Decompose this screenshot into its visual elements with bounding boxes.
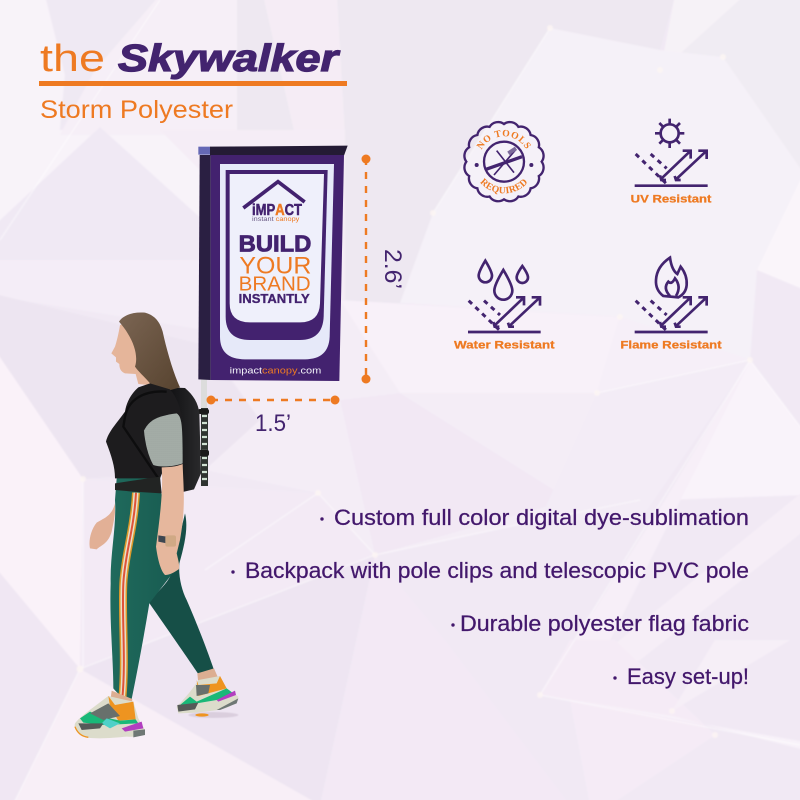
flag xyxy=(198,146,348,381)
label: flame resistant: Flame Resistant xyxy=(620,340,722,352)
icon: water resistant xyxy=(468,261,541,332)
title underline xyxy=(39,81,347,86)
person with backpack xyxy=(75,312,238,738)
far ankle xyxy=(197,668,218,683)
width dimension xyxy=(206,396,340,437)
near ankle xyxy=(111,691,132,707)
flag url: impactcanopy.com xyxy=(230,366,322,376)
near shoe xyxy=(75,696,145,738)
width label: 1.5’ xyxy=(255,410,291,437)
icon: no tools required badge: REQUIRED xyxy=(480,178,526,194)
flag: YOUR xyxy=(239,252,311,279)
title: Skywalker: Skywalker xyxy=(118,38,341,80)
logo subtitle: instant canopy xyxy=(252,216,300,223)
icons xyxy=(454,118,722,352)
flag inner frame xyxy=(226,170,328,340)
subtitle: Storm Polyester xyxy=(40,96,233,124)
neck and face xyxy=(111,323,152,385)
bullet 1: Custom full color digital dye-sublimation xyxy=(334,505,749,530)
height label: 2.6’ xyxy=(379,249,406,289)
flag: INSTANTLY xyxy=(239,292,310,306)
flag side sleeve xyxy=(198,155,211,380)
logo roof xyxy=(243,182,305,208)
label: water resistant: Water Resistant xyxy=(454,340,555,352)
title xyxy=(39,38,347,124)
rear hand xyxy=(89,503,115,549)
flag light panel xyxy=(220,164,334,359)
icon: no tools required badge xyxy=(463,120,545,202)
backpack xyxy=(169,387,201,492)
bullet 3: Durable polyester flag fabric xyxy=(460,611,749,636)
icon: no tools required badge: NO TOOLS xyxy=(476,130,531,150)
belt xyxy=(115,477,162,493)
feature list xyxy=(231,505,749,689)
near leg xyxy=(110,474,180,699)
flag top sleeve xyxy=(210,146,348,156)
flag headline: BUILD xyxy=(239,230,311,256)
shirt xyxy=(106,383,183,478)
far leg xyxy=(148,513,214,674)
hair xyxy=(119,312,180,391)
flag body xyxy=(211,155,344,381)
label: UV resistant: UV Resistant xyxy=(631,194,712,206)
far shoe xyxy=(177,676,238,717)
title: the: the xyxy=(40,38,105,80)
pants stripe xyxy=(122,493,136,698)
bullet 2: Backpack with pole clips and telescopic PVC pole xyxy=(245,558,749,583)
shadow xyxy=(188,712,238,718)
flag: BRAND xyxy=(239,272,311,295)
backpack strap xyxy=(123,391,167,478)
watch xyxy=(158,535,176,547)
sleeve xyxy=(144,413,183,467)
bullet 4: Easy set-up! xyxy=(627,664,749,689)
flag tip xyxy=(198,147,210,155)
near arm xyxy=(156,464,184,575)
height dimension xyxy=(362,154,406,384)
logo name: iMPACT xyxy=(252,202,303,219)
icon: UV resistant xyxy=(635,119,708,186)
pole xyxy=(198,378,209,486)
icon: flame resistant xyxy=(635,258,708,332)
